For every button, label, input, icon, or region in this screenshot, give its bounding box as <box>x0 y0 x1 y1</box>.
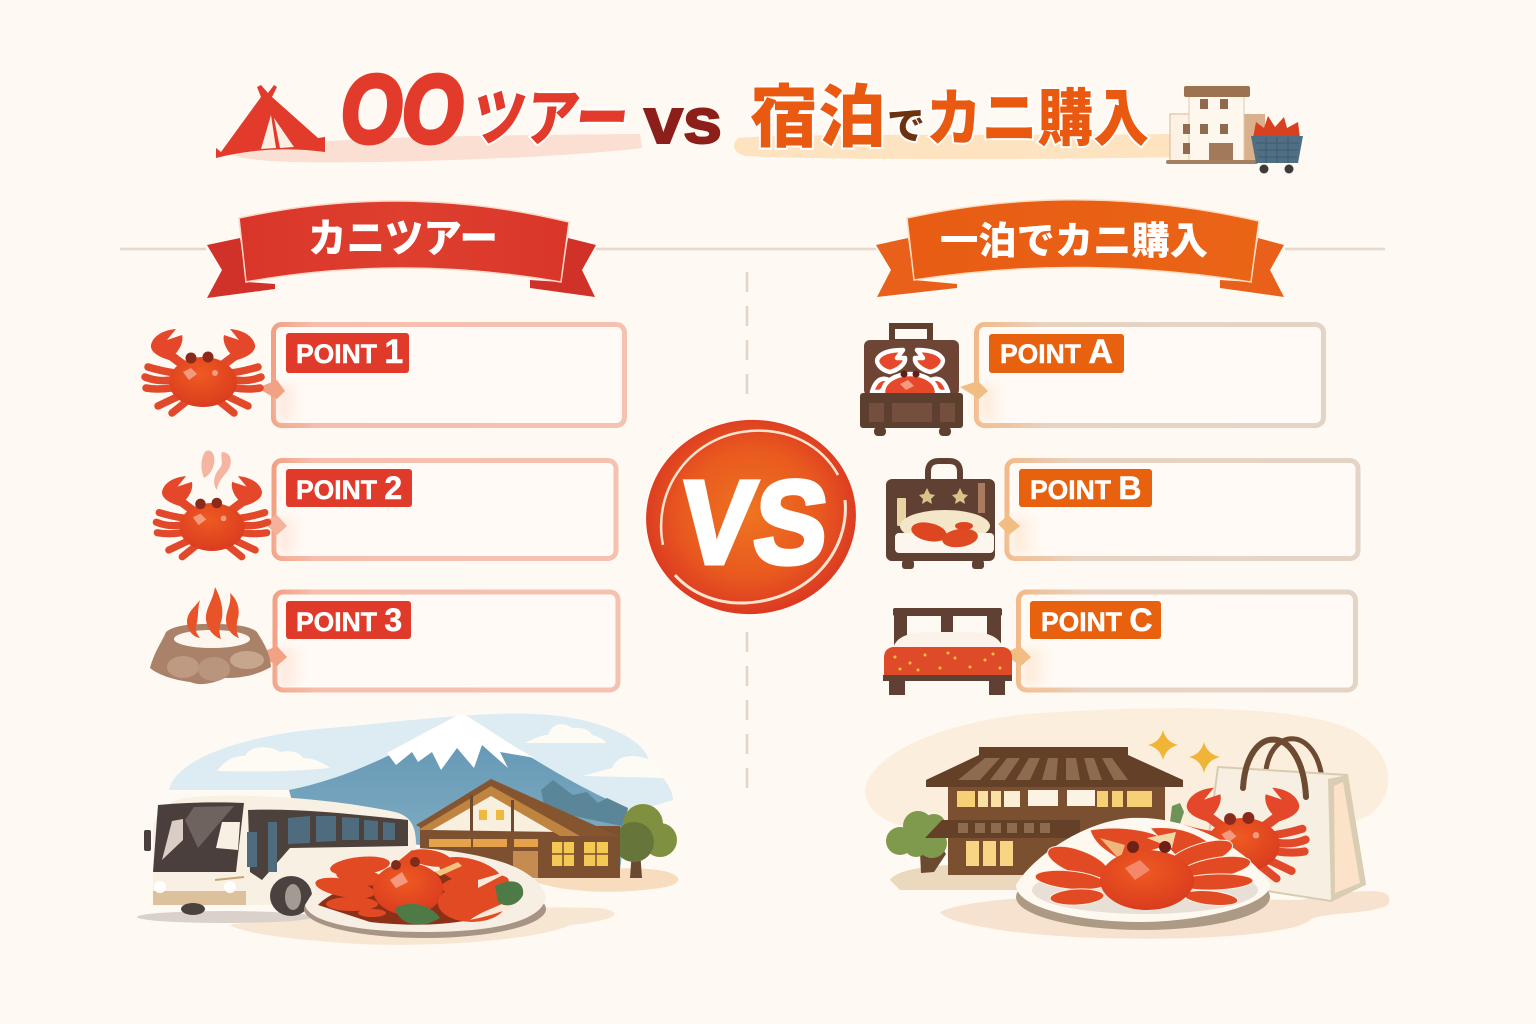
peach background <box>865 708 1388 830</box>
tag <box>286 601 411 639</box>
title text: stay and buy crab: 宿泊 <box>750 80 886 156</box>
title text: OO tour <box>341 56 633 163</box>
tag <box>1030 601 1161 639</box>
icon: hot spring <box>150 587 271 684</box>
ground <box>890 864 1030 890</box>
ribbon label: 一泊でカニ購入 <box>940 221 1208 263</box>
bus <box>144 796 416 916</box>
VS badge <box>636 410 866 624</box>
title <box>216 56 1303 174</box>
pointer <box>1003 646 1031 666</box>
pointer <box>960 381 988 399</box>
icon: suitcase with crab <box>860 326 963 436</box>
section rule lines <box>120 248 1385 250</box>
icon: tent <box>216 85 325 158</box>
center dashed divider <box>746 272 748 795</box>
tag text: POINT A <box>1000 333 1113 371</box>
panel: point A <box>960 324 1324 426</box>
brush stroke: red <box>225 134 642 162</box>
tag <box>989 334 1124 373</box>
inn <box>925 747 1184 875</box>
panel: point B <box>998 460 1358 558</box>
tag <box>286 469 412 507</box>
panel: point C <box>1003 592 1356 690</box>
title text: OO tour: ツアー <box>468 85 633 154</box>
lodge <box>416 779 621 878</box>
sparkles <box>1148 730 1220 773</box>
plate <box>304 848 546 938</box>
icon: bed <box>883 608 1012 695</box>
panel: point 1 <box>257 324 624 426</box>
icon: steaming crab <box>156 450 268 557</box>
mountain <box>289 713 628 870</box>
scene: inn, shopping bag and crab plate <box>865 708 1390 939</box>
plate <box>1016 818 1270 930</box>
crab on plate <box>1034 827 1253 910</box>
ground <box>530 868 678 892</box>
pointer <box>258 646 287 666</box>
title text: stay and buy crab: で <box>887 106 925 148</box>
icon: crab <box>145 329 261 413</box>
panel: point 2 <box>263 460 616 558</box>
pointer <box>998 515 1020 535</box>
ribbon label: カニツアー <box>308 217 498 261</box>
ribbon: crab tour <box>207 201 596 298</box>
ribbon: stay and buy <box>876 200 1284 297</box>
tree <box>886 811 947 873</box>
title text: stay and buy crab <box>750 80 1149 156</box>
tag text: POINT B <box>1030 470 1141 506</box>
tag <box>1019 469 1152 507</box>
brush stroke: orange <box>734 134 1180 159</box>
scene: bus, mountain and crab dish <box>137 713 678 945</box>
sky <box>169 714 673 810</box>
title text: stay and buy crab: カニ購入 <box>926 85 1149 154</box>
icon: hotel with cart <box>1166 86 1303 174</box>
tree <box>614 804 677 878</box>
snow cap <box>387 713 535 770</box>
pointer <box>257 380 285 399</box>
tag <box>286 333 409 373</box>
title text: vs: vs <box>644 85 722 157</box>
icon: suitcase with crab meat <box>886 461 995 569</box>
crab behind plate <box>1180 788 1306 878</box>
VS text: VS <box>676 457 833 589</box>
far ridge <box>541 780 628 826</box>
panel: point 3 <box>258 592 618 690</box>
pointer <box>263 515 287 535</box>
tag text: POINT 3 <box>296 602 402 638</box>
tag text: POINT 2 <box>296 470 402 506</box>
tag text: POINT C <box>1041 602 1152 638</box>
clouds <box>217 724 665 778</box>
bus shadow <box>137 911 313 923</box>
title text: OO tour: OO <box>341 56 463 163</box>
tag text: POINT 1 <box>296 333 403 371</box>
crab dish <box>314 846 523 925</box>
shopping bag <box>1203 739 1365 901</box>
